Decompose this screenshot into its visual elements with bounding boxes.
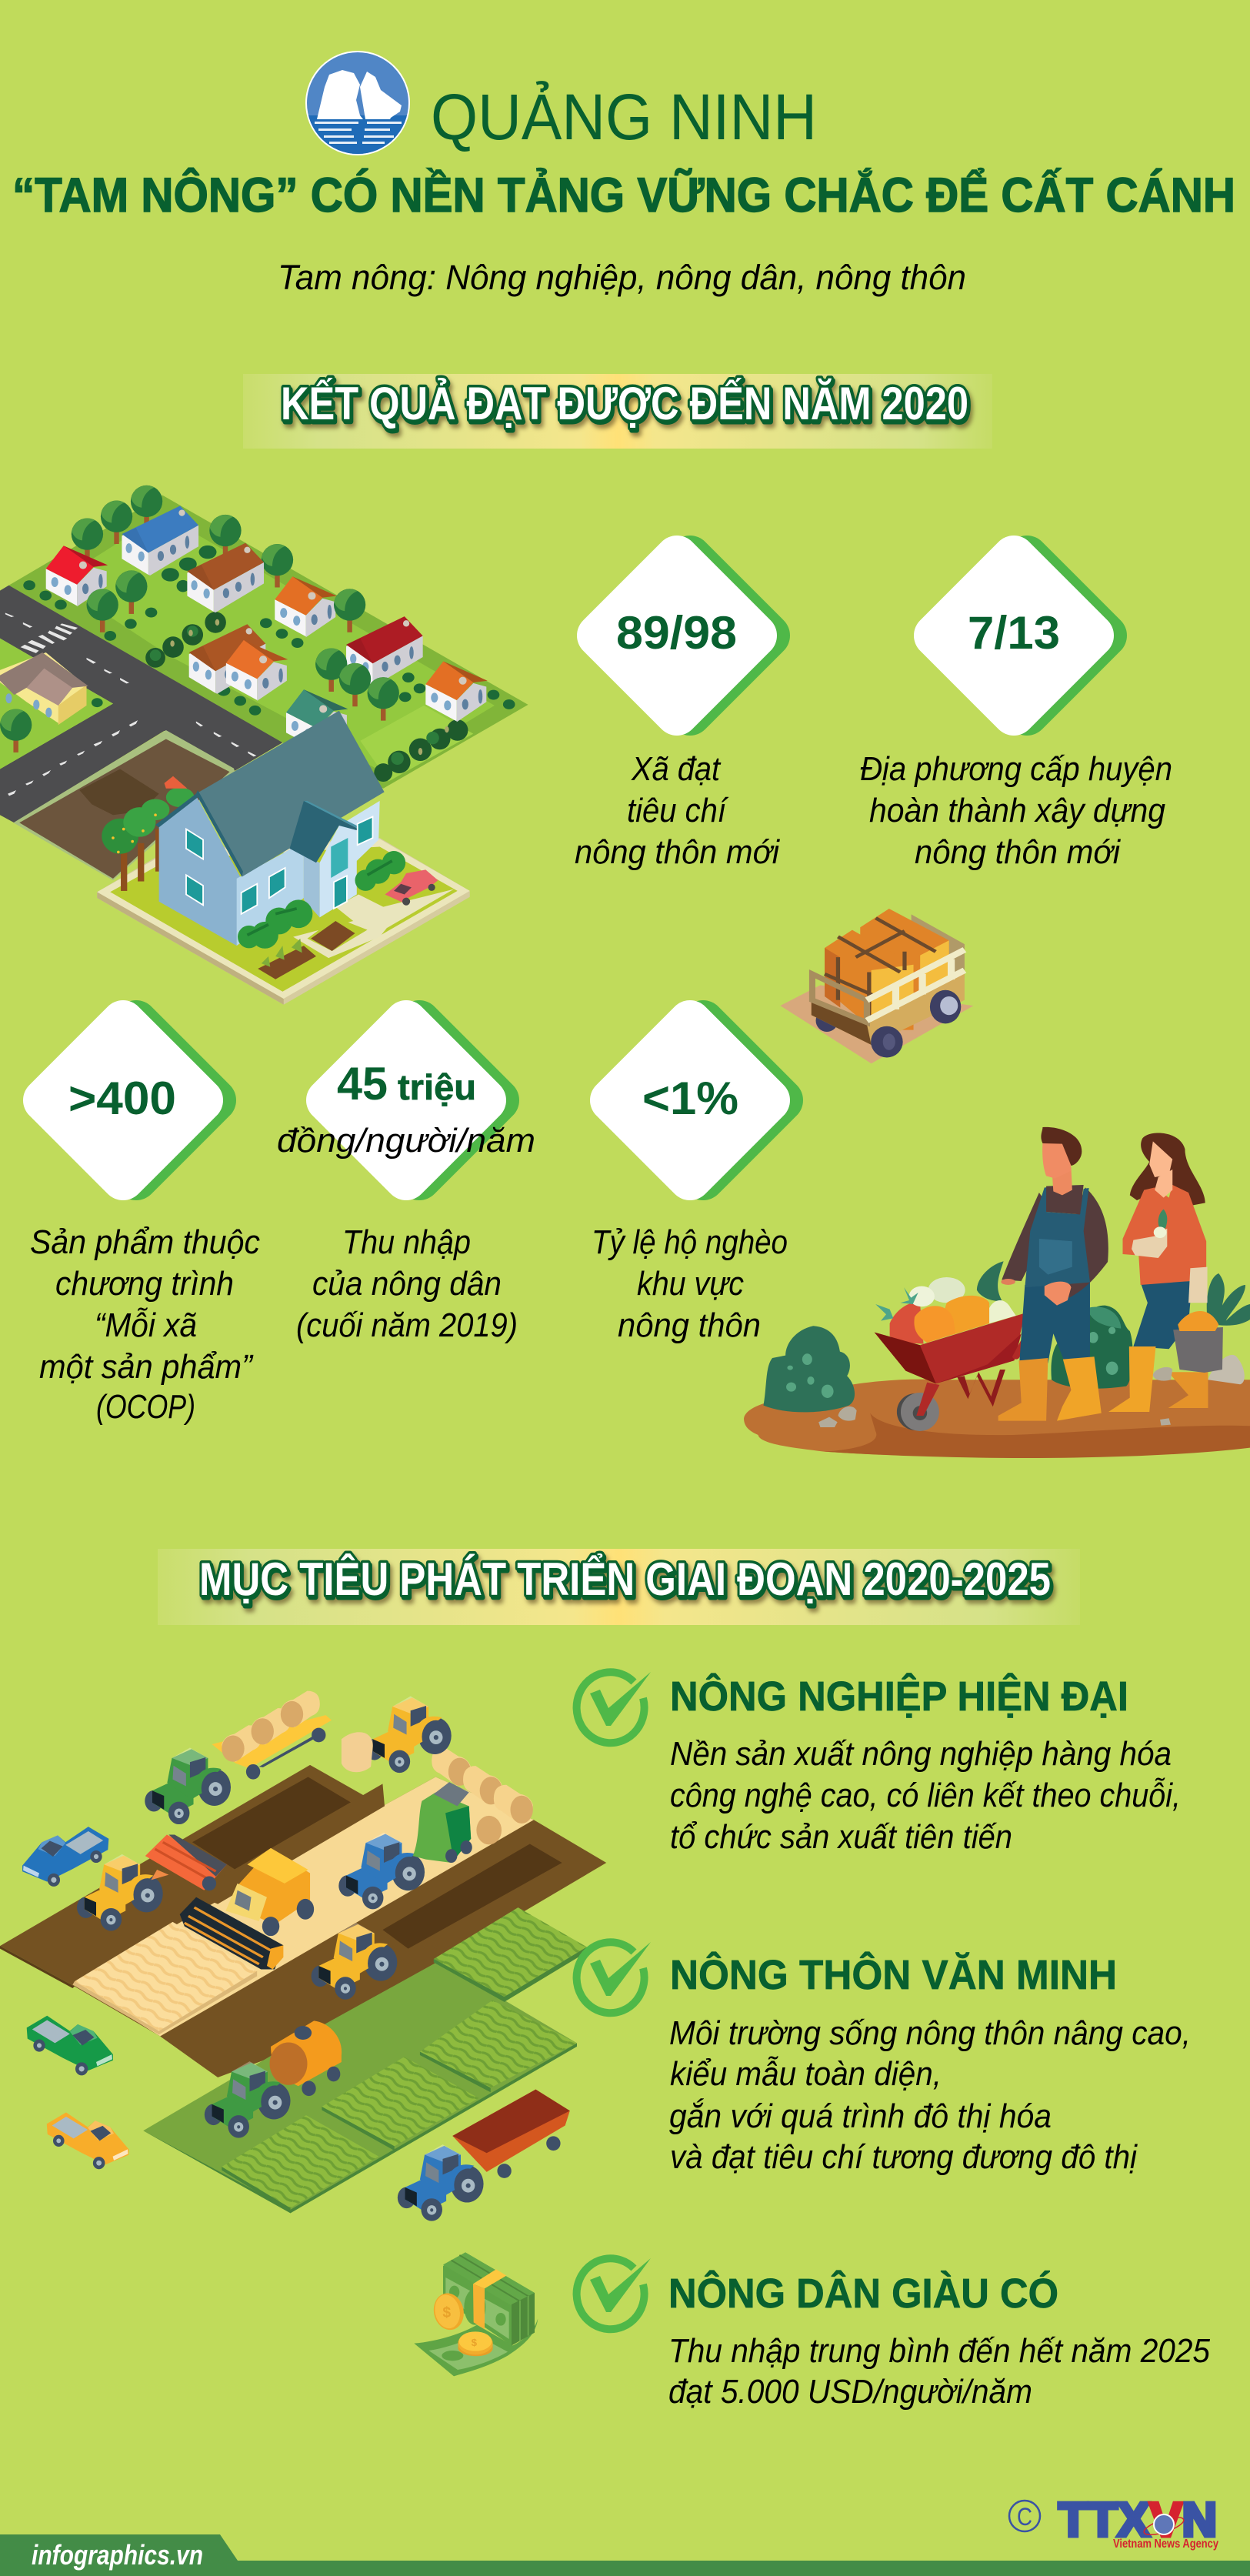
big house xyxy=(155,711,385,946)
illustration: isometric village xyxy=(0,486,528,1005)
text: poverty caption: Tỷ lệ hộ nghèo xyxy=(592,1223,788,1261)
title: Quảng Ninh: QUẢNG NINH xyxy=(431,81,817,153)
section banner: targets: MỤC TIÊU PHÁT TRIỂN GIAI ĐOẠN 2020-2025 xyxy=(199,1553,1051,1605)
icon: money stack and coins: $ xyxy=(472,2337,478,2348)
section banner: results: KẾT QUẢ ĐẠT ĐƯỢC ĐẾN NĂM 2020 xyxy=(281,378,968,429)
section banner: results xyxy=(243,374,992,449)
village houses xyxy=(46,486,488,750)
illustration: mechanised farm xyxy=(0,1691,606,2221)
text: OCOP caption: “Mỗi xã xyxy=(95,1306,197,1344)
stat: 45 triệu: đồng/người/năm xyxy=(277,1122,535,1160)
stat: 7/13: 7/13 xyxy=(968,607,1060,659)
goal 2: civilised countryside: Môi trường sống nông thôn nâng cao, xyxy=(669,2014,1191,2052)
text: 89/98 caption xyxy=(575,750,780,871)
text: OCOP caption: chương trình xyxy=(55,1265,234,1303)
tanker xyxy=(270,2020,342,2096)
red seed wagon xyxy=(145,1834,227,1890)
goal 1: modern agriculture xyxy=(577,1672,1181,1856)
stat: >400 xyxy=(45,1022,215,1179)
icon: check mark xyxy=(577,2258,651,2329)
baler xyxy=(413,1782,472,1863)
text: 7/13 caption: hoàn thành xây dựng xyxy=(869,792,1165,829)
bales xyxy=(432,1747,533,1844)
goal 1: modern agriculture: NÔNG NGHIỆP HIỆN ĐẠI xyxy=(670,1673,1128,1720)
text: OCOP caption xyxy=(30,1223,260,1426)
stat: 45 triệu xyxy=(277,1022,535,1179)
shrubs and garden xyxy=(238,851,438,949)
goal 2: civilised countryside: NÔNG THÔN VĂN MINH xyxy=(670,1951,1117,1998)
icon: money stack and coins xyxy=(414,2252,538,2376)
goal 1: modern agriculture: tổ chức sản xuất tiên tiến xyxy=(670,1818,1012,1856)
goal 3: wealthy farmers: đạt 5.000 USD/người/năm xyxy=(668,2373,1032,2411)
stat: <1%: <1% xyxy=(642,1073,738,1124)
stat: <1% xyxy=(612,1022,782,1179)
text: 7/13 caption: nông thôn mới xyxy=(915,833,1121,871)
icon: cart with hay bales xyxy=(780,909,973,1063)
text: OCOP caption: một sản phẩm” xyxy=(39,1348,254,1386)
goal 1: modern agriculture: công nghệ cao, có liên kết theo chuỗi, xyxy=(670,1777,1181,1814)
stat: 7/13 xyxy=(935,557,1105,714)
text: 7/13 caption: Địa phương cấp huyện xyxy=(860,750,1172,788)
stat: 89/98: 89/98 xyxy=(616,607,737,659)
goal 2: civilised countryside xyxy=(577,1942,1191,2176)
goal 3: wealthy farmers: NÔNG DÂN GIÀU CÓ xyxy=(668,2270,1058,2317)
stat: >400: >400 xyxy=(68,1073,176,1124)
stat: 89/98 xyxy=(598,557,768,714)
text: OCOP caption: Sản phẩm thuộc xyxy=(30,1223,260,1261)
goal 3: wealthy farmers xyxy=(577,2258,1210,2411)
text: OCOP caption: (OCOP) xyxy=(96,1388,195,1426)
text: income caption xyxy=(296,1223,518,1344)
logo: TTXVN: C xyxy=(1017,2503,1032,2531)
section banner: targets xyxy=(158,1549,1080,1625)
text: poverty caption: khu vực xyxy=(637,1265,744,1303)
text: poverty caption xyxy=(592,1223,788,1344)
stat: 45 triệu: triệu xyxy=(398,1067,476,1107)
bucket and rocks xyxy=(818,1311,1245,1427)
combine harvester xyxy=(180,1848,314,1969)
plants xyxy=(763,1261,1250,1412)
text: 89/98 caption: tiêu chí xyxy=(627,792,728,829)
goal 2: civilised countryside: gắn với quá trình đô thị hóa xyxy=(669,2097,1052,2135)
fruit trees xyxy=(102,776,195,891)
icon: money stack and coins: $ xyxy=(442,2305,451,2321)
logo: TTXVN: TTXVN xyxy=(1058,2494,1217,2547)
bushes xyxy=(23,546,515,716)
stat: 45 triệu: 45 xyxy=(337,1058,388,1109)
text: 89/98 caption: Xã đạt xyxy=(631,750,722,788)
green fields xyxy=(143,1907,587,2213)
dump trailer xyxy=(452,2090,570,2178)
icon: check mark xyxy=(577,1672,651,1743)
tractors xyxy=(77,1697,484,2221)
yellow house at left lawn xyxy=(0,652,88,725)
text: income caption: của nông dân xyxy=(312,1265,502,1303)
goal 3: wealthy farmers: Thu nhập trung bình đến hết năm 2025 xyxy=(668,2332,1210,2370)
icon: check mark xyxy=(577,1942,651,2013)
platform xyxy=(97,838,470,1005)
text: 7/13 caption xyxy=(860,750,1172,871)
hay trailer xyxy=(212,1691,332,1780)
text: poverty caption: nông thôn xyxy=(618,1306,761,1344)
goal 2: civilised countryside: và đạt tiêu chí tương đương đô thị xyxy=(670,2138,1138,2176)
footer band xyxy=(0,2534,1250,2576)
wheelbarrow xyxy=(875,1277,1049,1431)
text: 89/98 caption: nông thôn mới xyxy=(575,833,780,871)
text: income caption: Thu nhập xyxy=(342,1223,471,1261)
text: income caption: (cuối năm 2019) xyxy=(296,1306,518,1344)
footer band: infographics.vn xyxy=(32,2539,203,2571)
goal 1: modern agriculture: Nền sản xuất nông nghiệp hàng hóa xyxy=(670,1735,1172,1773)
hedges xyxy=(145,612,468,782)
logo: TTXVN: Vietnam News Agency xyxy=(1113,2538,1218,2551)
woman xyxy=(1108,1133,1208,1412)
man xyxy=(998,1127,1108,1421)
icon: Quảng Ninh logo xyxy=(304,51,412,162)
goal 2: civilised countryside: kiểu mẫu toàn diện, xyxy=(670,2055,942,2093)
illustration: farmers with wheelbarrow xyxy=(744,1127,1250,1458)
subtitle: Tam nông: Nông nghiệp, nông dân, nông thôn xyxy=(278,258,966,297)
pickups xyxy=(22,1827,128,2169)
